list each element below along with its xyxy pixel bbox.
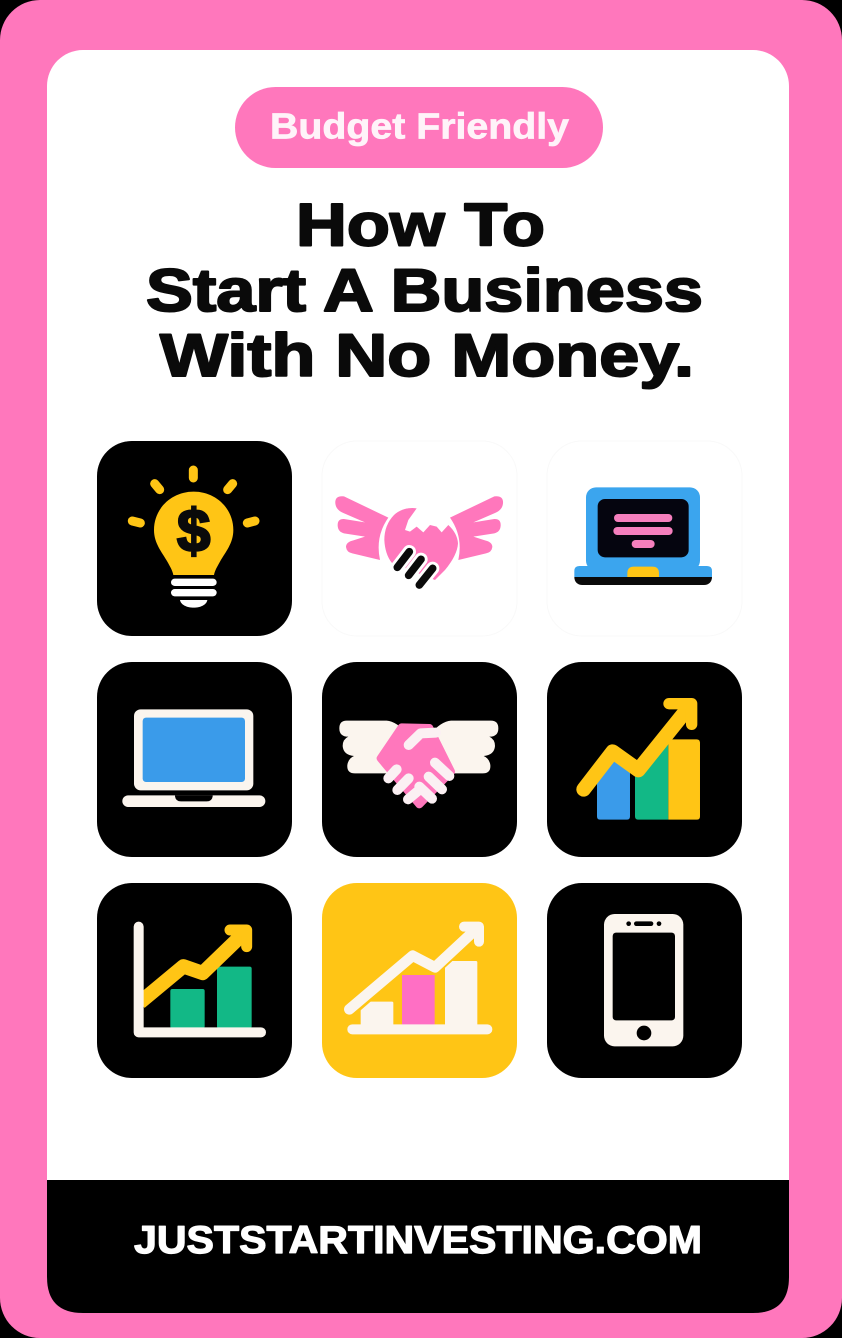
tile: winged handshake on black bbox=[322, 662, 517, 857]
icon: pink winged handshake bbox=[335, 496, 503, 585]
title: Start A Business bbox=[146, 257, 703, 324]
tile: smartphone on black bbox=[547, 883, 742, 1078]
tile: laptop on black bbox=[97, 662, 292, 857]
tile: light bulb with dollar sign bbox=[97, 441, 292, 636]
tile: yellow chart bbox=[322, 883, 517, 1078]
badge: Budget Friendly: Budget Friendly bbox=[270, 106, 569, 146]
icon: light bulb: $ bbox=[177, 497, 210, 564]
badge: Budget Friendly bbox=[235, 87, 603, 168]
icon: laptop bbox=[122, 709, 265, 807]
tile: colourful growth chart on black bbox=[547, 662, 742, 857]
title bbox=[146, 192, 703, 389]
icon: cream wings and pink handshake bbox=[339, 721, 498, 804]
tile: blue laptop with text lines bbox=[547, 441, 742, 636]
tile: axes chart on black bbox=[97, 883, 292, 1078]
icon: smartphone bbox=[604, 914, 683, 1046]
tile: pink winged handshake bbox=[322, 441, 517, 636]
icon: light bulb bbox=[132, 470, 255, 608]
icon: cream chart with pink bar bbox=[347, 927, 492, 1034]
title: With No Money. bbox=[160, 322, 694, 389]
title: How To bbox=[296, 192, 545, 258]
icon: line and bar chart bbox=[139, 927, 261, 1032]
icon: bar chart with rising arrow bbox=[584, 704, 700, 820]
footer banner: JUSTSTARTINVESTING.COM bbox=[134, 1219, 702, 1262]
footer banner bbox=[47, 1180, 789, 1313]
icon: blue laptop bbox=[574, 487, 712, 585]
